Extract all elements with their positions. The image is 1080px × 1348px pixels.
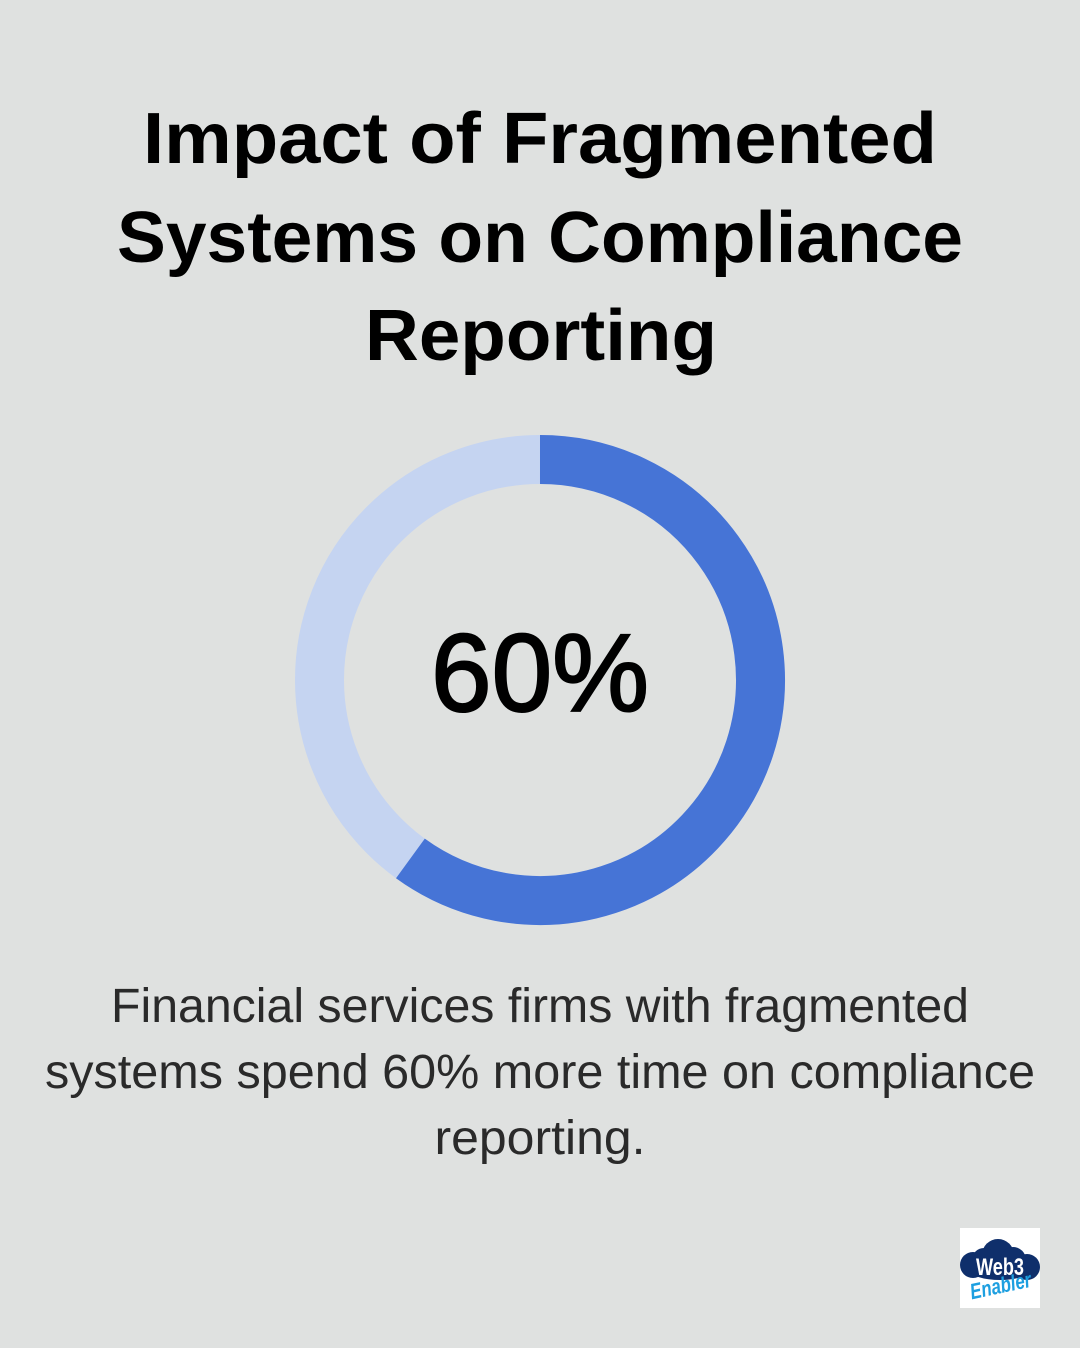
logo cloud — [960, 1239, 1040, 1280]
description: reporting. — [434, 1112, 646, 1165]
donut chart: 60% — [320, 460, 760, 900]
title: Systems on Compliance — [117, 198, 963, 278]
logo wordmark: Web3 — [976, 1254, 1024, 1281]
center value: 60% — [431, 612, 649, 735]
title — [117, 99, 963, 376]
logo: Web3 Enabler: Enabler — [968, 1267, 1034, 1304]
description — [45, 980, 1035, 1165]
title: Reporting — [365, 296, 717, 376]
description: systems spend 60% more time on compliance — [45, 1046, 1035, 1099]
description: Financial services firms with fragmented — [111, 980, 969, 1033]
logo: Web3 Enabler — [960, 1228, 1040, 1308]
title: Impact of Fragmented — [143, 99, 937, 179]
